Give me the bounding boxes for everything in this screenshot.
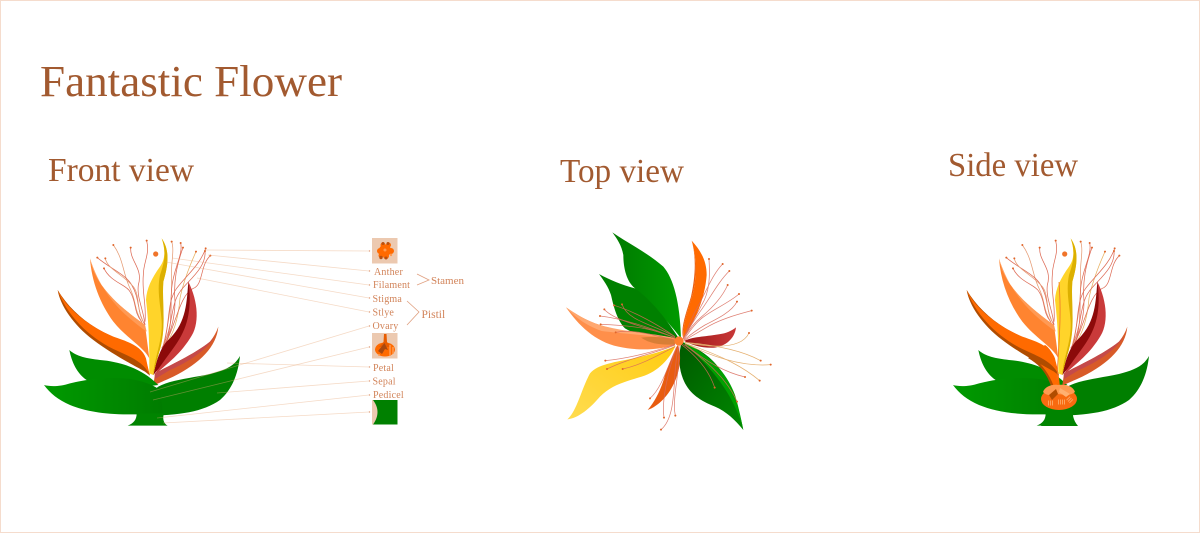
style and stigma bbox=[153, 251, 158, 257]
leaf: right bbox=[143, 356, 240, 416]
bracket: stamen: Stamen bbox=[431, 275, 464, 287]
pedicel bbox=[128, 413, 168, 426]
part labels: Stigma bbox=[372, 294, 402, 305]
leaves bbox=[44, 350, 240, 426]
bracket: stamen bbox=[417, 274, 464, 287]
side pedicel bbox=[1041, 406, 1078, 426]
petal: orange left bbox=[58, 290, 150, 376]
side petals bbox=[967, 238, 1127, 390]
part labels: Sepal bbox=[372, 376, 396, 388]
center bbox=[674, 336, 684, 346]
petal: orange top bbox=[682, 241, 707, 338]
side stigma bbox=[1062, 251, 1067, 257]
thumbnail: sepal and pedicel bbox=[372, 400, 398, 424]
side view flower bbox=[953, 238, 1149, 426]
thumbnail: pistil bbox=[372, 333, 398, 358]
side stamens bbox=[1005, 240, 1120, 348]
petal: orange bottom bbox=[648, 345, 680, 410]
bracket: pistil: Pistil bbox=[422, 309, 445, 321]
leaf: back left bbox=[69, 350, 158, 388]
heading: top view: Top view bbox=[560, 153, 685, 190]
petal: red bbox=[153, 282, 197, 376]
heading: side view: Side view bbox=[948, 147, 1079, 184]
part labels: Ovary bbox=[372, 321, 398, 332]
petal: light orange bbox=[566, 307, 675, 349]
side leaves bbox=[953, 350, 1149, 426]
leaf: second green bbox=[599, 274, 680, 342]
leaf: dark bottom right bbox=[679, 342, 743, 430]
part labels: Filament bbox=[373, 280, 410, 291]
leader dots bbox=[369, 250, 370, 413]
leaf: big top green bbox=[612, 232, 681, 338]
petals bbox=[58, 238, 218, 386]
part labels: Anther bbox=[374, 267, 403, 278]
stamens bbox=[96, 240, 211, 348]
thumbnail: stamen bbox=[372, 238, 398, 264]
part labels: Stlye bbox=[372, 308, 394, 318]
petal: light orange bbox=[90, 258, 149, 358]
part labels bbox=[372, 267, 410, 401]
heading: front view: Front view bbox=[48, 152, 195, 189]
title: Fantastic Flower bbox=[40, 57, 342, 106]
side ovary bbox=[1041, 385, 1077, 410]
petal: yellow bbox=[567, 346, 676, 419]
petal: orange red bbox=[153, 327, 218, 386]
side style line bbox=[1057, 282, 1060, 380]
leader lines bbox=[150, 250, 369, 423]
part labels: Petal bbox=[373, 363, 394, 374]
top view flower bbox=[566, 232, 772, 431]
leaf: front left bbox=[44, 378, 163, 415]
bracket: pistil bbox=[407, 301, 445, 325]
petal: yellow bbox=[146, 238, 167, 375]
parts legend bbox=[369, 238, 464, 424]
front view flower bbox=[44, 238, 240, 426]
top view stamens bbox=[600, 259, 771, 430]
petal: red bbox=[684, 327, 736, 348]
part labels: Pedicel bbox=[373, 390, 404, 401]
top view anther tips bbox=[599, 258, 772, 431]
